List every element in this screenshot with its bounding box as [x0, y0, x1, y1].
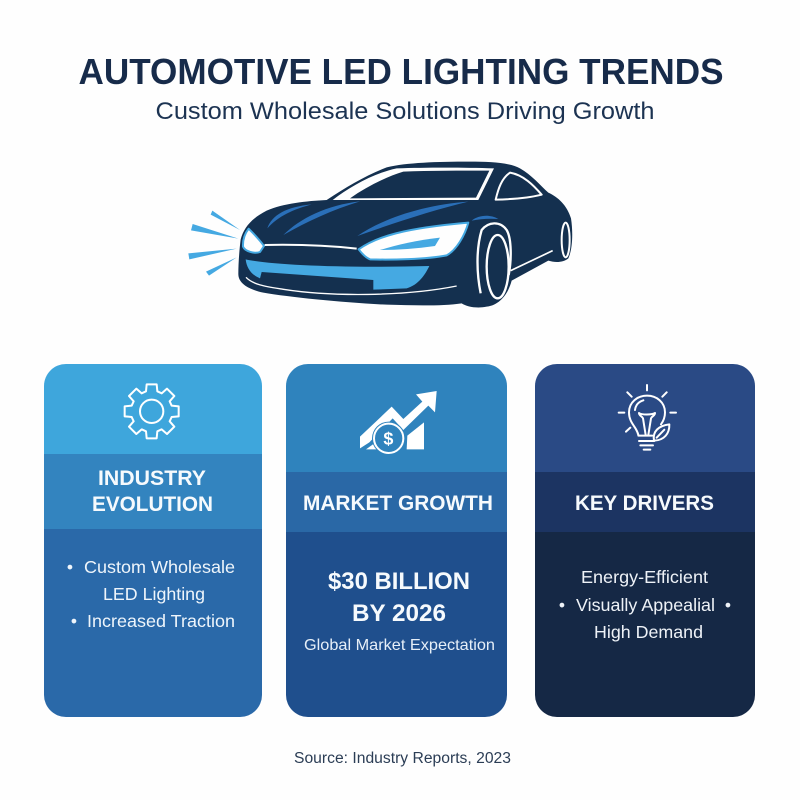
side sill — [511, 251, 553, 271]
hood accents — [267, 201, 498, 236]
heading — [92, 466, 213, 516]
title: AUTOMOTIVE LED LIGHTING TRENDS — [78, 51, 724, 92]
illustration: car with headlight beams — [188, 162, 572, 307]
left headlight — [243, 229, 264, 253]
panel: market growth — [286, 364, 507, 717]
market value: $30 BILLION — [328, 568, 470, 595]
front wheel — [478, 223, 511, 298]
driver list: Energy-Efficient — [581, 567, 708, 587]
icon: light bulb with leaf — [619, 385, 676, 450]
bullet list: • — [67, 557, 73, 577]
heading: EVOLUTION — [92, 492, 213, 516]
right headlight — [359, 223, 468, 260]
market caption: Global Market Expectation — [304, 637, 495, 654]
subtitle: Custom Wholesale Solutions Driving Growth — [156, 98, 654, 125]
driver list: • — [725, 595, 731, 615]
heading: INDUSTRY — [98, 466, 206, 490]
heading: MARKET GROWTH — [303, 491, 493, 515]
side window — [496, 173, 542, 200]
driver list: High Demand — [594, 622, 703, 642]
heading: KEY DRIVERS — [575, 491, 714, 515]
headlight inner — [380, 238, 440, 250]
panel: industry evolution — [44, 364, 262, 717]
bullet list: • — [71, 611, 77, 631]
grille line — [265, 245, 357, 249]
icon: growth arrow with dollar coin: $ — [383, 429, 393, 449]
driver list: • — [559, 595, 565, 615]
bullet list — [67, 557, 235, 631]
icon: gear — [125, 384, 179, 438]
driver list — [559, 567, 731, 642]
car body — [238, 162, 572, 307]
rear wheel — [562, 223, 570, 257]
driver list: Visually Appealial — [576, 595, 715, 615]
market value: BY 2026 — [352, 600, 446, 627]
lower bumper light — [246, 259, 429, 290]
source note: Source: Industry Reports, 2023 — [294, 750, 511, 767]
market value — [328, 568, 470, 627]
lower trim line — [246, 277, 457, 294]
icon: growth arrow with dollar coin — [360, 391, 437, 455]
bullet list: Custom Wholesale — [84, 557, 235, 577]
panel: key drivers — [535, 364, 755, 717]
bullet list: Increased Traction — [87, 611, 235, 631]
beams — [188, 211, 240, 276]
bullet list: LED Lighting — [103, 584, 205, 604]
windshield — [333, 168, 494, 200]
